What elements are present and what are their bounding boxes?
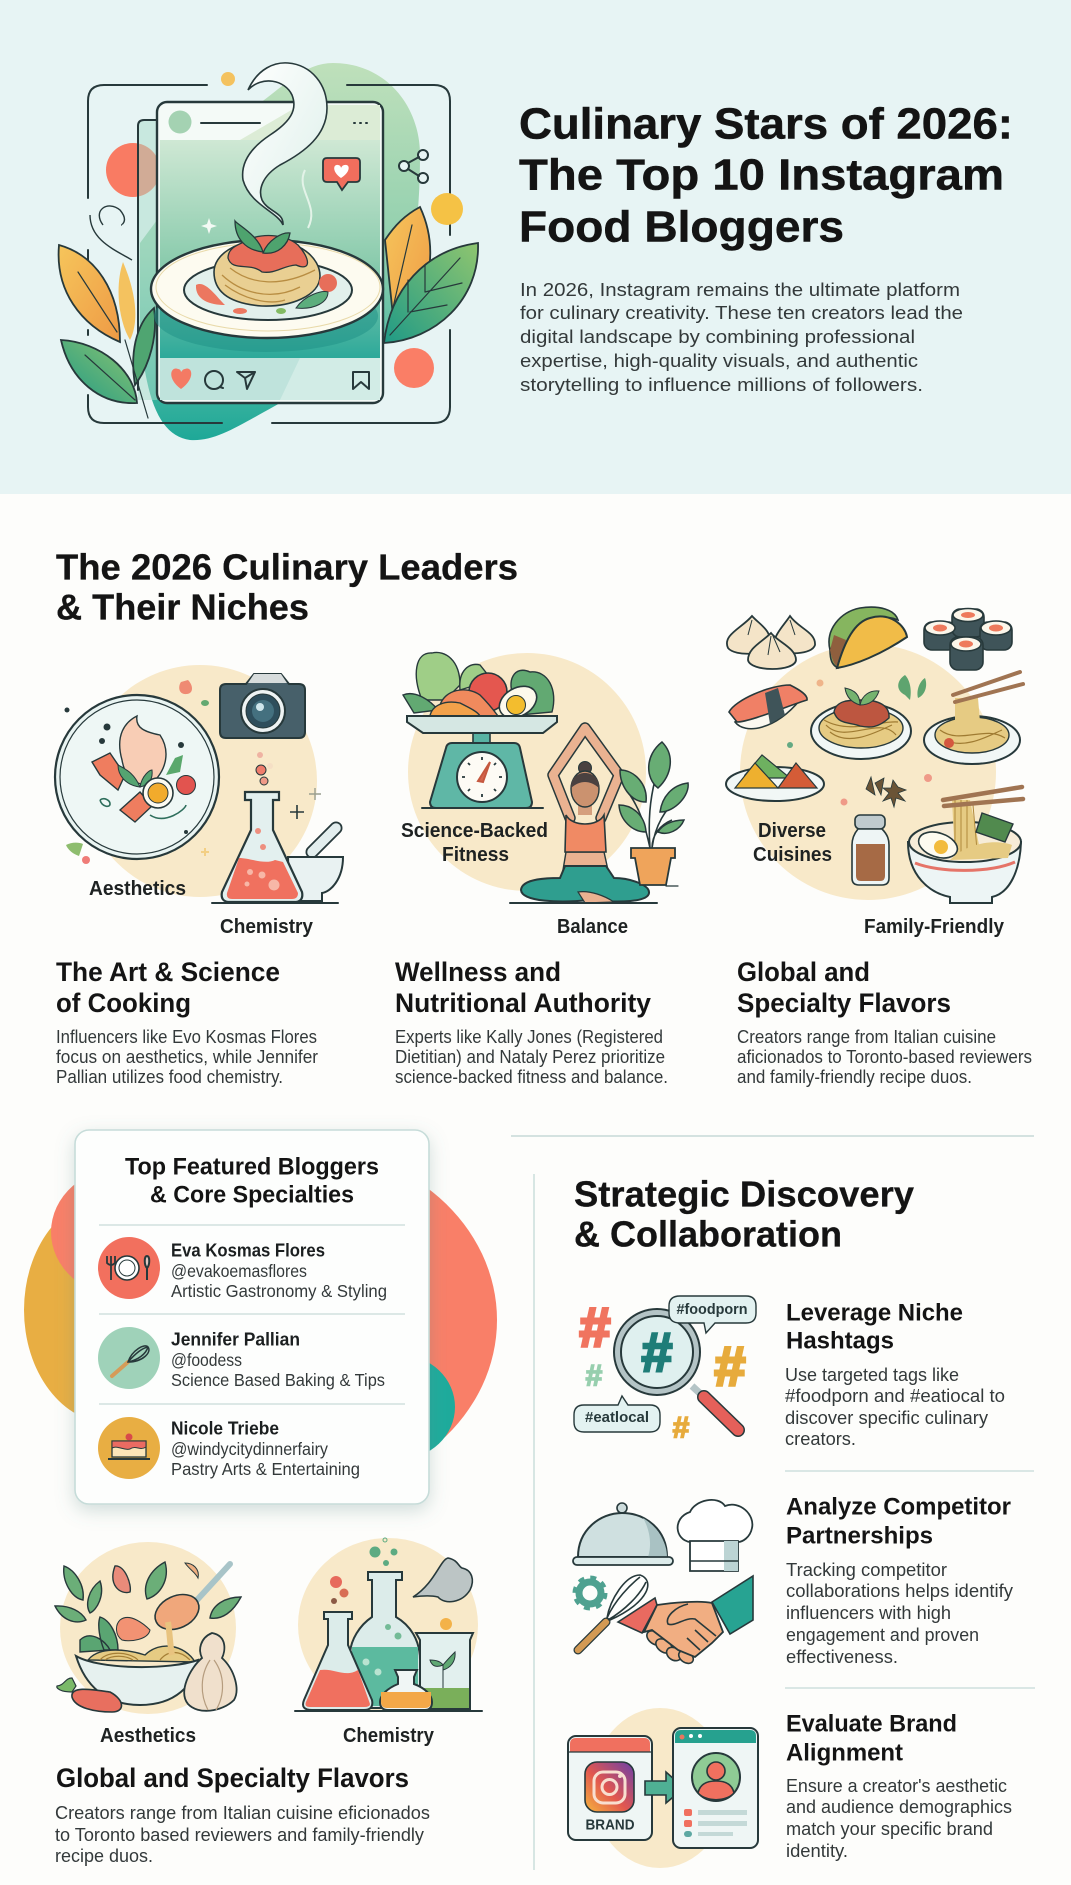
label: science-backed fitness: Fitness: [442, 844, 509, 866]
blogger row: Jennifer Pallian: [98, 1327, 385, 1390]
panel: global cuisine illustration: [726, 607, 1023, 903]
food on scale: [403, 652, 554, 724]
label: chemistry lower: Chemistry: [343, 1725, 435, 1747]
text block: art and science: Influencers like Evo Kosmas Flores: [56, 1027, 317, 1047]
sushi rolls: [924, 608, 1012, 670]
text block: wellness: [395, 957, 668, 1087]
section heading: culinary leaders: [56, 546, 518, 628]
icon: hashtag magnifier: #foodporn: [676, 1302, 748, 1318]
yoga figure: [510, 728, 657, 903]
icon: kitchen scale: [407, 716, 557, 808]
spice jar: [852, 815, 889, 885]
text block: evaluate brand alignment: Alignment: [786, 1740, 903, 1766]
icon: hashtag magnifier: #: [579, 1296, 611, 1358]
text block: analyze competitor partnerships: Analyze Competitor: [786, 1494, 1011, 1520]
label: chemistry: Chemistry: [220, 916, 314, 938]
section heading: culinary leaders: & Their Niches: [56, 586, 309, 628]
label: family-friendly: Family-Friendly: [864, 916, 1005, 938]
hero illustration: Instagram post with pasta: [59, 63, 478, 440]
text block: evaluate brand alignment: Evaluate Brand: [786, 1710, 957, 1738]
section heading: culinary leaders: The 2026 Culinary Leaders: [56, 546, 518, 588]
blogger row: Jennifer Pallian: @foodess: [171, 1350, 242, 1370]
hero intro text: for culinary creativity. These ten creators lead the: [520, 303, 963, 323]
icon: mortar and pestle: [288, 828, 343, 901]
potted plant: [619, 742, 688, 886]
hero title: Food Bloggers: [519, 202, 844, 252]
text block: analyze competitor partnerships: Partnerships: [786, 1522, 933, 1550]
label: diverse cuisines: [753, 820, 832, 866]
steam swirl: [243, 63, 327, 225]
text block: evaluate brand alignment: and audience demographics: [786, 1797, 1012, 1817]
icon: camera: [220, 674, 305, 738]
text block: analyze competitor partnerships: influencers with high: [786, 1603, 951, 1623]
text block: global flavors: and family-friendly recipe duos.: [737, 1067, 972, 1087]
star anise and seeds: [866, 777, 906, 807]
panel: top featured bloggers card: [75, 1130, 429, 1504]
text block: leverage niche hashtags: creators.: [785, 1429, 856, 1449]
taco: [829, 607, 907, 668]
text block: art and science: focus on aesthetics, while Jennifer: [56, 1047, 318, 1067]
icon: hashtag magnifier: #: [641, 1320, 673, 1384]
text block: leverage niche hashtags: #foodporn and #eatiocal to: [785, 1386, 1005, 1406]
noodles with chopsticks: [924, 672, 1023, 764]
text block: global flavors: aficionados to Toronto-based reviewers: [737, 1047, 1032, 1067]
blogger row: Eva Kosmas Flores: Eva Kosmas Flores: [171, 1240, 325, 1260]
text block: global flavors: Creators range from Italian cuisine: [737, 1027, 996, 1047]
text block: leverage niche hashtags: Hashtags: [786, 1328, 894, 1354]
hero title: [519, 100, 1013, 252]
text block: analyze competitor partnerships: collaborations helps identify: [786, 1581, 1013, 1601]
text block: evaluate brand alignment: [786, 1710, 1012, 1861]
text block: wellness: science-backed fitness and balance.: [395, 1067, 668, 1087]
illustration: chemistry flasks: [295, 1538, 482, 1712]
text block: analyze competitor partnerships: effectiveness.: [786, 1647, 898, 1667]
text block: global flavors: Global and: [737, 957, 870, 987]
ramen bowl: [908, 787, 1023, 903]
text block: analyze competitor partnerships: engagement and proven: [786, 1625, 979, 1645]
dumplings: [727, 616, 815, 669]
icon: flask: [222, 792, 302, 902]
text block: global flavors: [737, 957, 1032, 1087]
hero intro text: [520, 280, 963, 395]
hero band: [0, 0, 1071, 494]
share icon: [399, 150, 428, 183]
spice plate: [726, 755, 824, 801]
label: science-backed fitness: Science-Backed: [401, 820, 548, 842]
text block: leverage niche hashtags: Use targeted tags like: [785, 1365, 959, 1385]
text block: art and science: of Cooking: [56, 988, 191, 1018]
text block: art and science: [56, 957, 318, 1087]
illustration: pasta bowl aesthetics: [55, 1542, 241, 1714]
text block: global and specialty flavors lower: recipe duos.: [55, 1846, 153, 1866]
hero intro text: expertise, high-quality visuals, and authentic: [520, 351, 918, 371]
icon: hashtag magnifier: #: [673, 1412, 690, 1444]
blogger row: Eva Kosmas Flores: Artistic Gastronomy & Styling: [171, 1281, 387, 1301]
hero title: Culinary Stars of 2026:: [519, 100, 1013, 148]
text block: art and science: The Art & Science: [56, 957, 280, 987]
blogger row: Jennifer Pallian: Science Based Baking & Tips: [171, 1370, 385, 1390]
blogger row: Nicole Triebe: Nicole Triebe: [171, 1418, 279, 1438]
section heading: strategic discovery: Strategic Discovery: [574, 1174, 914, 1214]
hero title: The Top 10 Instagram: [519, 150, 1004, 200]
text block: evaluate brand alignment: Ensure a creator's aesthetic: [786, 1776, 1007, 1796]
panel: wellness illustration: [403, 652, 688, 903]
text block: leverage niche hashtags: [785, 1300, 1005, 1449]
icon: hashtag magnifier: [574, 1296, 756, 1444]
right leaves: [385, 207, 430, 335]
plate with pasta: [151, 221, 383, 352]
icon: brand to creator alignment: BRAND: [586, 1816, 635, 1834]
text block: global and specialty flavors lower: to Toronto based reviewers and family-friendly: [55, 1825, 424, 1845]
text block: leverage niche hashtags: discover specific culinary: [785, 1408, 988, 1428]
hero intro text: digital landscape by combining professional: [520, 327, 915, 347]
icon: hashtag magnifier: #eatlocal: [585, 1410, 649, 1426]
label: balance: Balance: [557, 916, 628, 938]
hero intro text: In 2026, Instagram remains the ultimate platform: [520, 280, 960, 300]
text block: global and specialty flavors lower: Creators range from Italian cuisine eficionados: [55, 1803, 430, 1823]
left leaves: [59, 245, 120, 342]
section heading: strategic discovery: & Collaboration: [574, 1214, 842, 1254]
text block: analyze competitor partnerships: Tracking competitor: [786, 1560, 947, 1580]
section heading: strategic discovery: [574, 1174, 914, 1254]
text block: art and science: Pallian utilizes food chemistry.: [56, 1067, 283, 1087]
hero intro text: storytelling to influence millions of followers.: [520, 375, 923, 395]
text block: leverage niche hashtags: Leverage Niche: [786, 1300, 963, 1326]
text block: global and specialty flavors lower: [55, 1763, 430, 1866]
label: aesthetics: Aesthetics: [89, 878, 186, 900]
text block: analyze competitor partnerships: [786, 1494, 1013, 1667]
label: diverse cuisines: Diverse: [758, 820, 826, 842]
nigiri: [729, 685, 807, 729]
text block: wellness: Experts like Kally Jones (Registered: [395, 1027, 663, 1047]
icon: cloche, chef hat, whisk, handshake: [573, 1500, 753, 1666]
blogger row: Eva Kosmas Flores: [98, 1237, 387, 1301]
label: aesthetics lower: Aesthetics: [100, 1725, 196, 1747]
icon: hashtag magnifier: #: [586, 1360, 603, 1392]
backdrop shapes behind card: [24, 1147, 497, 1493]
panel: art and science illustration: [55, 665, 343, 903]
icon: brand to creator alignment: [568, 1708, 758, 1868]
text block: wellness: Wellness and: [395, 957, 561, 987]
label: diverse cuisines: Cuisines: [753, 844, 832, 866]
text block: wellness: Dietitian) and Nataly Perez prioritize: [395, 1047, 665, 1067]
label: science-backed fitness: [401, 820, 548, 866]
text block: evaluate brand alignment: match your specific brand: [786, 1819, 993, 1839]
panel: top featured bloggers card: Top Featured Bloggers: [125, 1154, 379, 1180]
panel: top featured bloggers card: & Core Specialties: [150, 1182, 354, 1208]
text block: global and specialty flavors lower: Global and Specialty Flavors: [56, 1763, 409, 1793]
like bubble: [323, 158, 360, 190]
text block: wellness: Nutritional Authority: [395, 988, 651, 1018]
text block: evaluate brand alignment: identity.: [786, 1841, 848, 1861]
blogger row: Eva Kosmas Flores: @evakoemasflores: [171, 1261, 307, 1281]
post action icons: [171, 369, 369, 389]
blogger row: Jennifer Pallian: Jennifer Pallian: [171, 1328, 300, 1350]
icon: hashtag magnifier: #: [714, 1334, 746, 1398]
blogger row: Nicole Triebe: [98, 1417, 360, 1479]
pasta bowl: [811, 688, 911, 759]
blogger row: Nicole Triebe: @windycitydinnerfairy: [171, 1439, 328, 1459]
text block: global flavors: Specialty Flavors: [737, 988, 951, 1018]
blogger row: Nicole Triebe: Pastry Arts & Entertaining: [171, 1459, 360, 1479]
